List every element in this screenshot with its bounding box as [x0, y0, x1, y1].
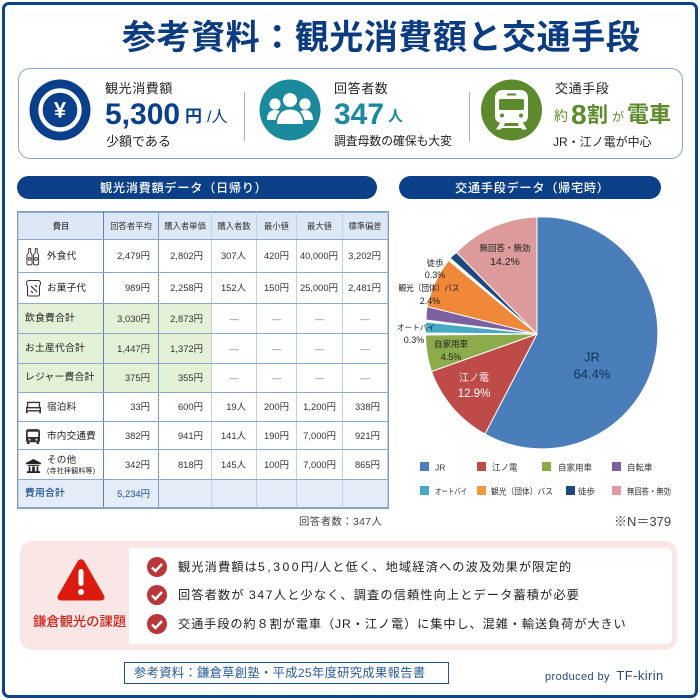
table: spending data: 購入者単価	[164, 221, 206, 231]
label: transport: 交通手段	[555, 81, 609, 96]
table: spending data: 宿泊料	[47, 402, 76, 413]
note: spending: 少額である	[106, 134, 171, 149]
table: spending data: 1,372円	[170, 343, 203, 354]
table: spending data: ―	[229, 343, 239, 354]
table: spending data: 190円	[264, 430, 289, 441]
table: spending data: 307人	[221, 250, 246, 261]
pie labels: 江ノ電	[459, 372, 489, 384]
icon: check 2	[147, 585, 167, 605]
table: spending data: 最大値	[307, 221, 332, 231]
slice: private car	[426, 334, 537, 372]
table: spending data: ―	[315, 372, 324, 383]
icon: yen coin: ¥	[54, 98, 67, 122]
table: spending data: 338円	[355, 401, 380, 412]
table: spending data: 342円	[125, 459, 150, 470]
icon: warning triangle	[58, 559, 104, 600]
table: spending data: 150円	[264, 282, 289, 293]
table: spending data: ―	[315, 343, 324, 354]
table: spending data: ―	[272, 313, 281, 324]
table: spending data: 818円	[178, 459, 203, 470]
value: respondents: 347	[334, 98, 384, 131]
table: spending data: 最小値	[264, 221, 289, 231]
panel: Kamakura tourism issues	[20, 541, 677, 650]
slice: JR	[485, 217, 658, 449]
heading: spending data	[17, 176, 377, 199]
table: spending data: 33円	[130, 401, 150, 412]
table: spending data: 3,030円	[117, 313, 150, 324]
table: spending data: 2,479円	[117, 250, 150, 261]
table: spending data: 標準偏差	[348, 221, 382, 231]
value: about 80% by train: 割	[587, 104, 608, 127]
table: spending data: 7,000円	[303, 459, 336, 470]
table: spending data: ―	[315, 313, 324, 324]
pie labels: 0.3%	[404, 335, 424, 345]
note: transport: JR・江ノ電が中心	[553, 135, 652, 149]
table: spending data: 費用合計	[25, 488, 65, 499]
value: spending: 5,300	[105, 98, 180, 131]
table: spending data: ―	[360, 313, 370, 324]
table: spending data: 購入者数	[217, 221, 251, 231]
table: spending data: ―	[360, 372, 370, 383]
slice: walking	[450, 252, 537, 334]
table: spending data: ―	[272, 372, 281, 383]
issue 3: 交通手段の約８割が電車（JR・江ノ電）に集中し、混雑・輸送負荷が大きい	[178, 616, 627, 630]
stat: respondents	[334, 81, 452, 148]
pie labels: 0.3%	[425, 270, 445, 280]
pie labels: 徒歩	[426, 258, 444, 268]
table: spending data: 費目	[53, 221, 69, 231]
table: spending data: 5,234円	[117, 488, 150, 499]
table: spending data: 921円	[355, 430, 380, 441]
slice: tour bus	[427, 260, 537, 334]
legend: オートバイ	[435, 486, 467, 496]
note: respondents: 調査母数の確保も大変	[334, 134, 452, 148]
white list area	[129, 548, 672, 644]
table: spending data: 2,873円	[170, 313, 203, 324]
pie chart: transport share	[397, 217, 658, 448]
label: respondents: 回答者数	[334, 81, 388, 96]
icon: check 3	[147, 614, 167, 634]
table: spending data: 7,000円	[303, 430, 336, 441]
pie labels: 14.2%	[490, 256, 520, 268]
heading: transport data	[399, 176, 661, 199]
legend: JR	[435, 462, 445, 472]
title: 参考資料：観光消費額と交通手段	[122, 19, 640, 57]
icon: check 1	[147, 557, 167, 577]
table: spending data: 1,447円	[117, 343, 150, 354]
table: spending data: 2,802円	[170, 250, 203, 261]
table: spending data: 600円	[178, 401, 203, 412]
table: spending data: 865円	[355, 459, 380, 470]
table: spending data: レジャー費合計	[25, 372, 94, 383]
pie labels: JR	[584, 350, 600, 364]
slice: motorcycle	[425, 322, 537, 334]
pie labels	[397, 243, 611, 400]
table: spending data	[17, 211, 389, 509]
icon: train	[481, 80, 542, 140]
slice: bicycle	[426, 306, 537, 334]
legend: 徒歩	[578, 486, 596, 496]
icon: yen coin	[30, 80, 90, 140]
note: respondents count: 回答者数：347人	[299, 516, 382, 528]
table: spending data: 外食代	[47, 251, 76, 262]
table: spending data: 152人	[221, 282, 246, 293]
divider	[244, 92, 245, 141]
table: spending data: 100円	[264, 459, 289, 470]
table: spending data: 回答者平均	[110, 221, 152, 231]
value: about 80% by train: 8	[571, 99, 587, 130]
table: spending data: ―	[272, 343, 281, 354]
table: spending data: 25,000円	[300, 282, 338, 293]
legend: 自家用車	[558, 462, 593, 472]
table: spending data: ―	[360, 343, 370, 354]
table: spending data: 1,200円	[303, 401, 336, 412]
table: spending data: 市内交通費	[47, 431, 96, 442]
value: about 80% by train: 電車	[627, 102, 671, 127]
legend: 江ノ電	[492, 462, 518, 472]
table: spending data: 200円	[264, 401, 289, 412]
table: spending data: ―	[229, 372, 239, 383]
table: spending data: 40,000円	[300, 250, 338, 261]
heading: transport data: 交通手段データ（帰宅時）	[455, 180, 610, 194]
table: spending data: 989円	[125, 282, 150, 293]
value: about 80% by train: が	[612, 110, 624, 124]
table: spending data: 145人	[221, 459, 246, 470]
legend: 自転車	[627, 462, 653, 472]
table: spending data: ―	[229, 313, 239, 324]
issue 2: 回答者数が 347人と少なく、調査の信頼性向上とデータ蓄積が必要	[178, 588, 580, 602]
table: spending data: お菓子代	[47, 283, 86, 294]
table: spending data: 2,481円	[348, 282, 381, 293]
pie labels: 12.9%	[458, 388, 490, 400]
table: spending data: 375円	[125, 372, 150, 383]
note: sample size: ※N＝379	[614, 514, 671, 528]
divider	[469, 92, 470, 141]
slice: no answer	[456, 217, 537, 334]
pie labels: 64.4%	[574, 366, 611, 382]
credit: produced by TF-kirin	[545, 668, 664, 683]
panel: key figures	[18, 68, 683, 159]
value: about 80% by train: 約	[554, 108, 568, 124]
table: spending data: 382円	[125, 430, 150, 441]
table: spending data: 420円	[264, 250, 289, 261]
icon: people	[260, 80, 320, 140]
table: spending data: 355円	[178, 372, 203, 383]
pie labels: 観光（団体）バス	[398, 283, 460, 293]
legend: 無回答・無効	[627, 486, 671, 496]
heading: spending data: 観光消費額データ（日帰り）	[100, 180, 268, 194]
pie labels: オートバイ	[397, 323, 435, 332]
table: spending data: 飲食費合計	[25, 313, 75, 324]
table: spending data: その他	[47, 455, 76, 466]
stat: spending	[105, 81, 227, 149]
table: spending data: 19人	[226, 401, 246, 412]
source box	[124, 662, 449, 684]
value: about 80% by train	[554, 99, 671, 130]
pie labels: 4.5%	[441, 352, 461, 362]
pie labels: 無回答・無効	[479, 243, 531, 253]
table: spending data: 2,258円	[170, 282, 203, 293]
pie labels: 2.4%	[420, 296, 440, 306]
issue 1: 観光消費額は5,300円/人と低く、地域経済への波及効果が限定的	[178, 560, 572, 574]
source box: 参考資料：鎌倉草創塾・平成25年度研究成果報告書	[134, 666, 425, 680]
stat: transport	[553, 81, 671, 149]
unit: persons: 人	[388, 108, 403, 125]
issues label: 鎌倉観光の課題	[33, 614, 126, 628]
pie labels: 自家用車	[434, 339, 468, 349]
label: spending: 観光消費額	[105, 81, 173, 96]
legend	[420, 462, 671, 496]
legend: 観光（団体）バス	[491, 486, 553, 496]
unit: yen per person: 円 /人	[185, 107, 227, 126]
table: spending data: (寺社拝観料等)	[47, 468, 95, 475]
table: spending data: 141人	[221, 430, 246, 441]
table: spending data: 3,202円	[348, 250, 381, 261]
table: spending data: 941円	[178, 430, 203, 441]
table: spending data: お土産代合計	[25, 343, 85, 354]
slice: Enoden	[432, 334, 537, 434]
